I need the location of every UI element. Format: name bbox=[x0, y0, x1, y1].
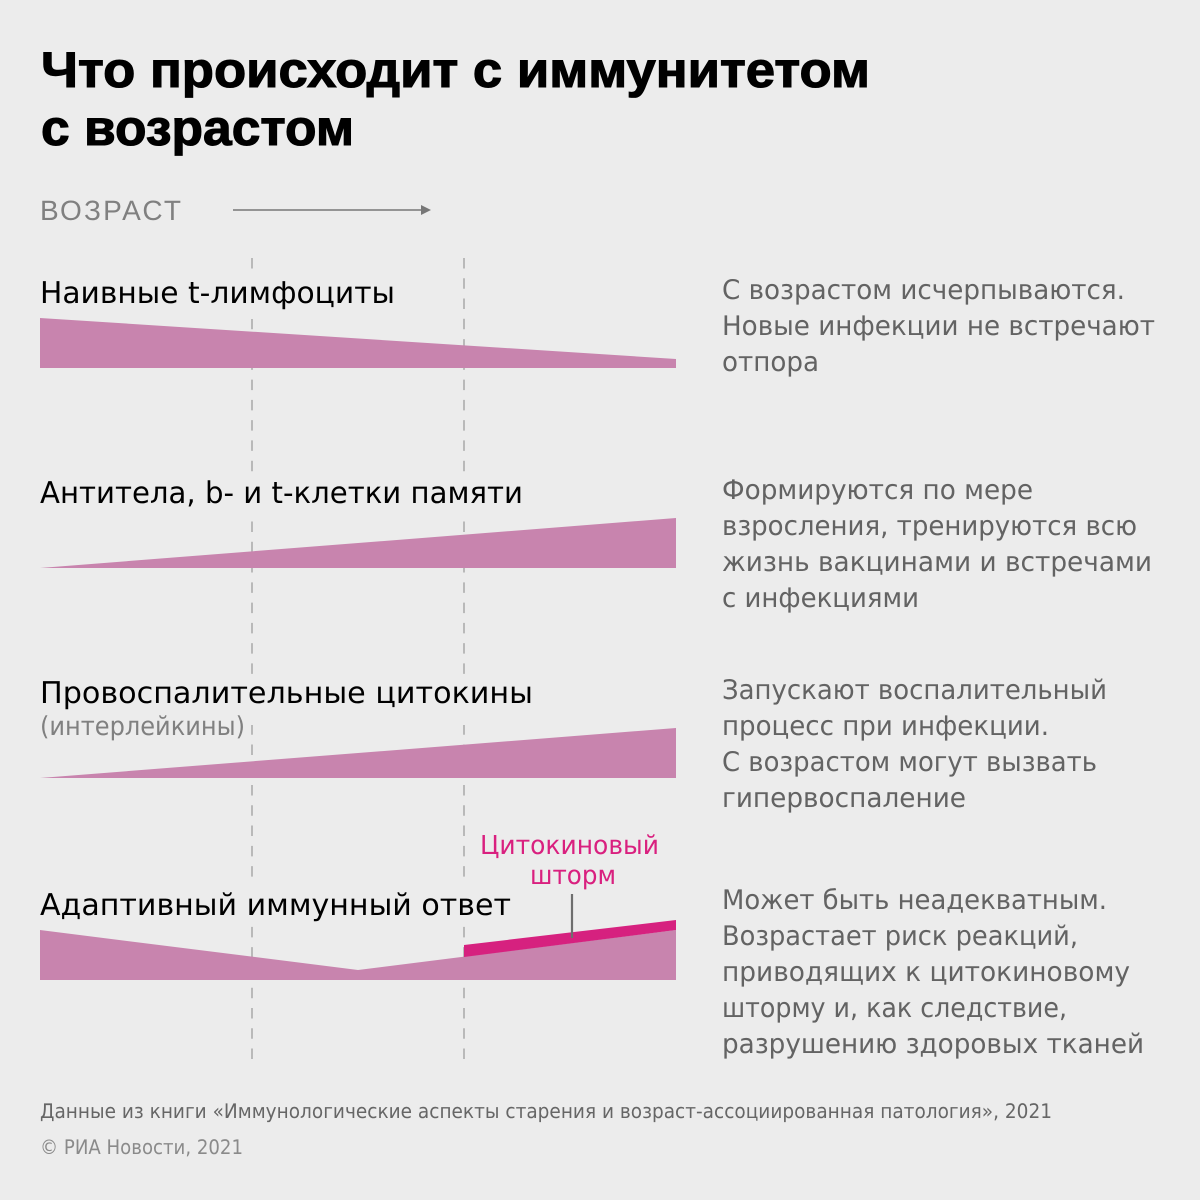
chart: increasing wedge bbox=[40, 728, 676, 778]
panel: pro-inflammatory cytokines bbox=[40, 675, 1107, 814]
description: взросления, тренируются всю bbox=[722, 511, 1137, 542]
description: Запускают воспалительный bbox=[722, 675, 1107, 706]
description bbox=[722, 275, 1155, 378]
description: гипервоспаление bbox=[722, 783, 966, 814]
description: Возрастает риск реакций, bbox=[722, 921, 1078, 952]
description: С возрастом могут вызвать bbox=[722, 747, 1097, 778]
panel: naive t-lymphocytes bbox=[40, 275, 1155, 378]
age axis label: ВОЗРАСТ bbox=[40, 195, 181, 226]
description: процесс при инфекции. bbox=[722, 711, 1049, 742]
heading: Наивные t-лимфоциты bbox=[40, 276, 395, 311]
cytokine storm label: шторм bbox=[530, 861, 616, 891]
heading: Провоспалительные цитокины bbox=[40, 676, 533, 711]
cytokine storm label: Цитокиновый bbox=[480, 831, 659, 861]
chart: increasing wedge bbox=[40, 518, 676, 568]
arrow: age direction bbox=[233, 205, 431, 215]
description bbox=[722, 475, 1152, 614]
description: шторму и, как следствие, bbox=[722, 993, 1067, 1024]
description: разрушению здоровых тканей bbox=[722, 1029, 1144, 1060]
description: отпора bbox=[722, 347, 819, 378]
cytokine storm label bbox=[480, 831, 659, 891]
heading: Адаптивный иммунный ответ bbox=[40, 888, 511, 923]
description: приводящих к цитокиновому bbox=[722, 957, 1130, 988]
subheading: (интерлейкины) bbox=[40, 712, 245, 742]
title: Что происходит с иммунитетом bbox=[41, 42, 870, 98]
description: С возрастом исчерпываются. bbox=[722, 275, 1125, 306]
panel: antibodies and memory cells bbox=[40, 475, 1152, 614]
description: Формируются по мере bbox=[722, 475, 1033, 506]
description: жизнь вакцинами и встречами bbox=[722, 547, 1152, 578]
cytokine storm band bbox=[464, 920, 676, 957]
description bbox=[722, 675, 1107, 814]
description: с инфекциями bbox=[722, 583, 919, 614]
chart: V-shaped area bbox=[40, 930, 676, 980]
title: с возрастом bbox=[41, 100, 354, 156]
heading: Антитела, b- и t-клетки памяти bbox=[40, 476, 523, 511]
source note: Данные из книги «Иммунологические аспекты старения и возраст-ассоциированная патология», 2021 bbox=[40, 1099, 1052, 1123]
description: Новые инфекции не встречают bbox=[722, 311, 1155, 342]
description bbox=[722, 885, 1144, 1060]
description: Может быть неадекватным. bbox=[722, 885, 1107, 916]
chart: decreasing wedge bbox=[40, 318, 676, 368]
leader line bbox=[571, 894, 573, 938]
title bbox=[41, 42, 870, 156]
copyright: © РИА Новости, 2021 bbox=[40, 1135, 243, 1159]
panel: adaptive immune response bbox=[40, 831, 1144, 1060]
